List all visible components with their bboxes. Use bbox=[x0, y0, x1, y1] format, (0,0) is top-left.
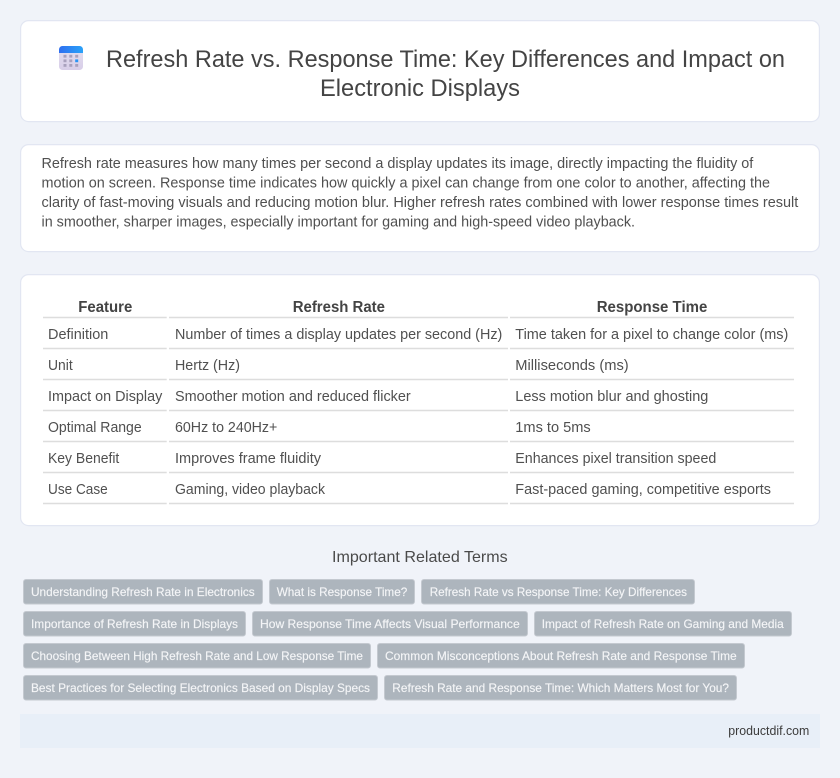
row: definition: Definition bbox=[48, 327, 108, 343]
footer bbox=[20, 714, 820, 748]
tag row 1: What is Response Time? bbox=[277, 585, 408, 599]
table header row: Feature bbox=[78, 299, 132, 316]
row: key benefit: Enhances pixel transition speed bbox=[515, 451, 716, 467]
text block: introduction: in smoother, sharper images, especially important for gaming and high-speed video playback. bbox=[42, 214, 635, 230]
tag row 4: Refresh Rate and Response Time: Which Matters Most for You? bbox=[392, 681, 729, 695]
tag row 1: Understanding Refresh Rate in Electronics bbox=[31, 585, 255, 599]
title: Refresh Rate vs. Response Time: Key Differences and Impact on bbox=[106, 46, 785, 73]
title: Electronic Displays bbox=[320, 75, 520, 102]
row: use case: Gaming, video playback bbox=[175, 482, 326, 498]
icon: calendar bbox=[59, 46, 83, 70]
row: optimal range bbox=[48, 420, 591, 436]
text block: introduction: clarity of fast-moving visuals and reducing motion blur. Higher refresh rates combined with lower response times result bbox=[42, 195, 798, 211]
footer: productdif.com bbox=[728, 723, 809, 738]
row: impact on display bbox=[48, 389, 708, 405]
text block: introduction: motion on screen. Response time indicates how quickly a pixel can change from one color to another, affecting the bbox=[42, 176, 770, 192]
row: optimal range: 1ms to 5ms bbox=[515, 420, 591, 436]
table header row: Response Time bbox=[597, 299, 707, 316]
panel: introduction bbox=[21, 145, 819, 252]
tag row 2: How Response Time Affects Visual Performance bbox=[260, 617, 520, 631]
row: impact on display: Less motion blur and ghosting bbox=[515, 389, 708, 405]
tag row 2: Importance of Refresh Rate in Displays bbox=[31, 617, 238, 631]
row: key benefit: Improves frame fluidity bbox=[175, 451, 322, 467]
text block: introduction bbox=[42, 156, 798, 230]
row: unit: Milliseconds (ms) bbox=[515, 358, 629, 374]
row: optimal range: 60Hz to 240Hz+ bbox=[175, 420, 277, 436]
row: use case: Fast-paced gaming, competitive esports bbox=[515, 482, 771, 498]
row: optimal range: Optimal Range bbox=[48, 420, 142, 436]
row: unit: Hertz (Hz) bbox=[175, 358, 240, 374]
tag row 3 bbox=[24, 644, 744, 668]
text block: introduction: Refresh rate measures how many times per second a display updates its image, directly impacting the fluidity of bbox=[42, 156, 754, 172]
tag row 3: Choosing Between High Refresh Rate and Low Response Time bbox=[31, 649, 363, 663]
tag row 1: Refresh Rate vs Response Time: Key Differences bbox=[430, 585, 687, 599]
panel: comparison table bbox=[21, 275, 819, 526]
tag row 4: Best Practices for Selecting Electronics Based on Display Specs bbox=[31, 681, 370, 695]
related term tags bbox=[24, 580, 792, 700]
row: definition: Time taken for a pixel to change color (ms) bbox=[515, 327, 788, 343]
row: impact on display: Impact on Display bbox=[48, 389, 163, 405]
row: use case bbox=[48, 482, 771, 498]
heading: related terms: Important Related Terms bbox=[332, 549, 508, 566]
table header row: Refresh Rate bbox=[293, 299, 385, 316]
row: use case: Use Case bbox=[48, 482, 108, 498]
row: definition: Number of times a display updates per second (Hz) bbox=[175, 327, 502, 343]
row: impact on display: Smoother motion and reduced flicker bbox=[175, 389, 411, 405]
tag row 3: Common Misconceptions About Refresh Rate and Response Time bbox=[385, 649, 737, 663]
tag row 4 bbox=[24, 676, 736, 700]
tag row 2 bbox=[24, 612, 792, 636]
row: unit: Unit bbox=[48, 358, 73, 374]
tag row 2: Impact of Refresh Rate on Gaming and Media bbox=[542, 617, 784, 631]
panel: header bbox=[21, 21, 819, 122]
row: definition bbox=[48, 327, 788, 343]
table header row bbox=[78, 299, 707, 316]
row: unit bbox=[48, 358, 629, 374]
tag row 1 bbox=[24, 580, 694, 604]
row: key benefit: Key Benefit bbox=[48, 451, 119, 467]
row: key benefit bbox=[48, 451, 716, 467]
title bbox=[106, 46, 785, 102]
